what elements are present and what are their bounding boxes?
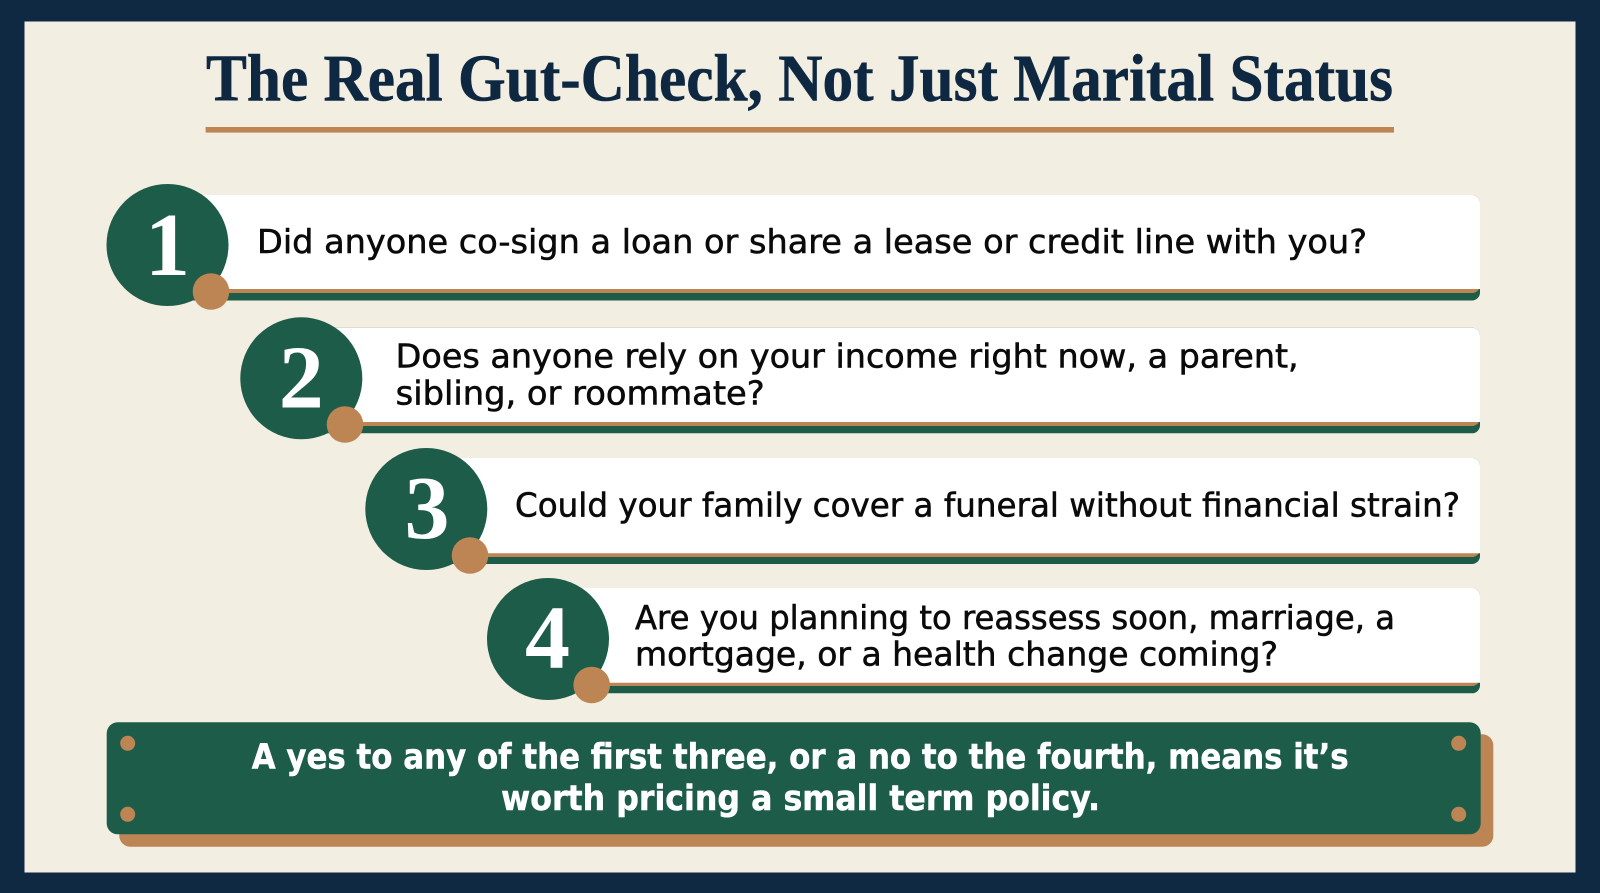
numeral 3: 3: [404, 459, 450, 558]
question 1 text: Did anyone co-sign a loan or share a lease or credit line with you?: [257, 222, 1367, 261]
title: The Real Gut-Check, Not Just Marital Status: [206, 42, 1393, 116]
card 1: [170, 195, 1480, 300]
title underline: [206, 127, 1394, 133]
badge dot 2: [327, 406, 363, 443]
card 2: [305, 328, 1480, 433]
banner text: A yes to any of the first three, or a no to the fourth, means it’s: [252, 738, 1349, 778]
question row 4: [487, 578, 1480, 703]
banner body: [107, 722, 1481, 834]
question row 2: [240, 317, 1480, 443]
question 2 text: Does anyone rely on your income right now, a parent,: [396, 336, 1299, 376]
question row 1: [106, 184, 1480, 310]
number badge 4: [487, 578, 609, 700]
question 2 text: sibling, or roommate?: [396, 374, 765, 412]
badge dot 3: [452, 537, 488, 574]
banner shadow: [119, 734, 1493, 847]
number badge 3: [365, 448, 487, 570]
number badge 1: [106, 184, 228, 306]
banner text: worth pricing a small term policy.: [501, 779, 1100, 819]
question 4 text: mortgage, or a health change coming?: [635, 634, 1278, 674]
card 4: [552, 588, 1480, 693]
question row 3: [365, 448, 1480, 574]
banner rivets: [120, 736, 1466, 822]
card 3: [430, 458, 1480, 564]
conclusion banner: [107, 722, 1493, 847]
badge dot 4: [573, 667, 610, 703]
question 3 text: Could your family cover a funeral without financial strain?: [515, 486, 1460, 524]
number badge 2: [240, 317, 362, 439]
question 4 text: Are you planning to reassess soon, marriage, a: [635, 598, 1395, 637]
numeral 1: 1: [145, 196, 190, 295]
badge dot 1: [193, 273, 229, 310]
numeral 4: 4: [525, 589, 570, 688]
numeral 2: 2: [279, 329, 324, 428]
